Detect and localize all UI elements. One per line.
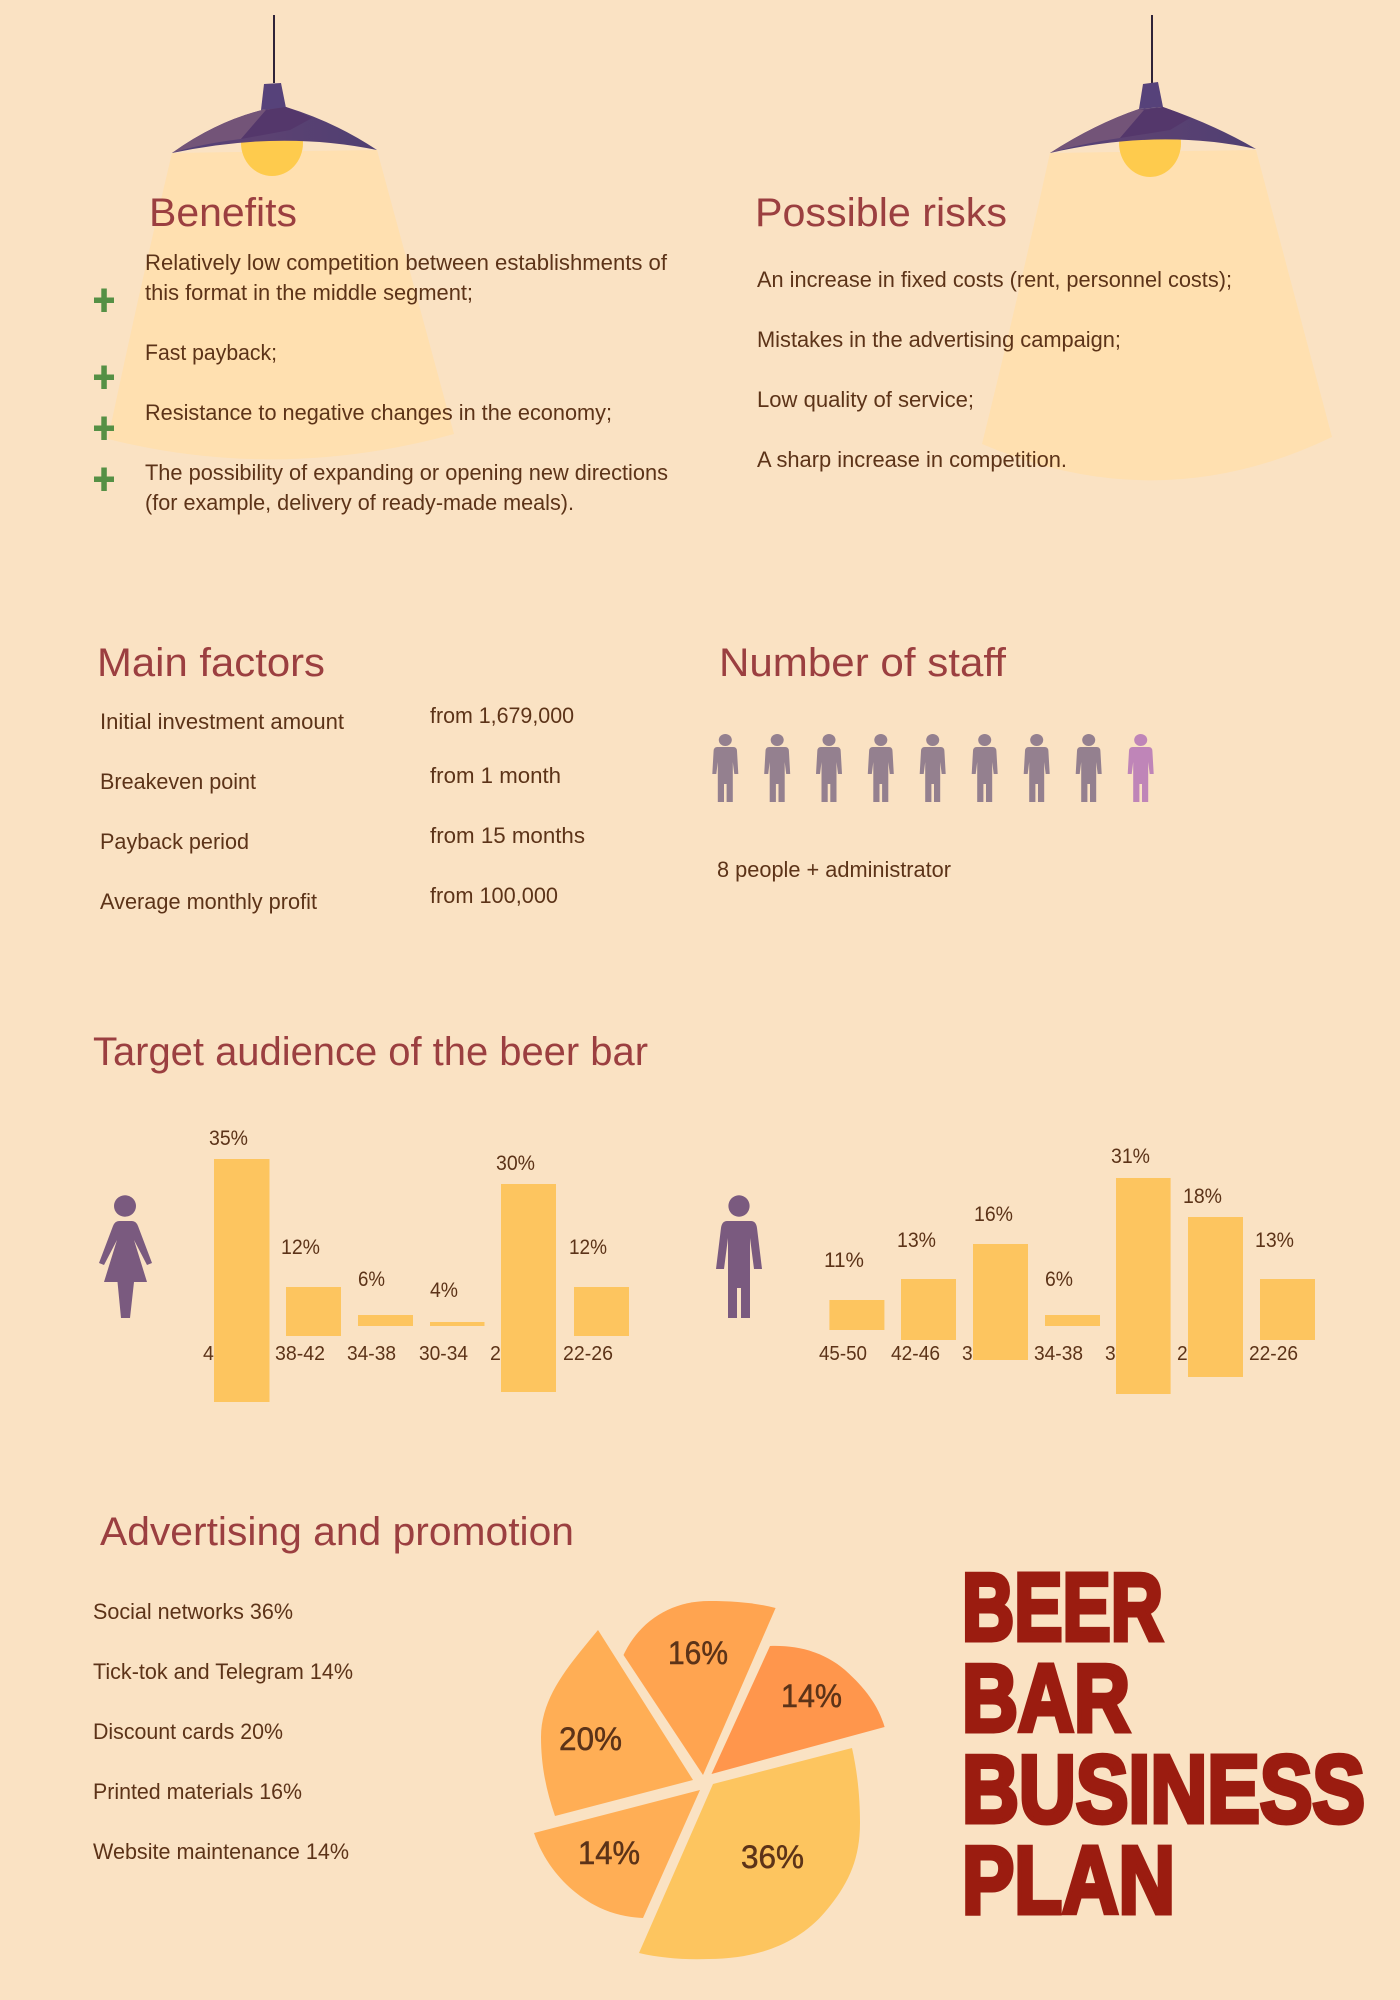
risks list: An increase in fixed costs (rent, personnel costs); bbox=[757, 267, 1232, 292]
staff caption: 8 people + administrator bbox=[717, 857, 951, 882]
staff pictogram bbox=[712, 734, 1154, 802]
main factors table: Initial investment amount bbox=[100, 709, 344, 734]
bar chart: women: 42-46 bbox=[203, 1343, 253, 1365]
main factors table: from 15 months bbox=[430, 823, 585, 848]
bar chart: women: 4% bbox=[430, 1279, 458, 1302]
benefits list bbox=[145, 250, 668, 515]
bar chart: women: 12% bbox=[569, 1236, 607, 1259]
bar chart: men: 30-34 bbox=[1105, 1343, 1154, 1365]
slice: 36% bbox=[639, 1748, 860, 1959]
plus icons bbox=[94, 288, 114, 491]
advertising list: Website maintenance 14% bbox=[93, 1839, 349, 1864]
benefits list: Fast payback; bbox=[145, 340, 277, 365]
bar chart: men: 45-50 bbox=[819, 1343, 867, 1365]
title bbox=[962, 1554, 1365, 1934]
lamp: risks bbox=[982, 15, 1332, 480]
bar chart: women bbox=[203, 1127, 629, 1402]
bar chart: men: 34-38 bbox=[1034, 1343, 1083, 1365]
risks list: A sharp increase in competition. bbox=[757, 447, 1067, 472]
bar chart: men: 18% bbox=[1183, 1185, 1222, 1208]
title: PLAN bbox=[962, 1827, 1175, 1934]
bar chart: men: 11% bbox=[824, 1249, 864, 1272]
pie chart: 14% bbox=[578, 1835, 640, 1871]
main factors table: Breakeven point bbox=[100, 769, 256, 794]
bar chart: men bbox=[819, 1145, 1315, 1394]
icon: man bbox=[716, 1195, 762, 1318]
bar chart: men: 38-42 bbox=[962, 1343, 1011, 1365]
benefits list: Relatively low competition between establishments of bbox=[145, 250, 668, 275]
bar chart: women: 34-38 bbox=[347, 1343, 396, 1365]
lamp shade: risks bbox=[1050, 82, 1256, 153]
benefits list: The possibility of expanding or opening new directions bbox=[145, 460, 668, 485]
advertising list bbox=[93, 1599, 353, 1864]
main factors table: Payback period bbox=[100, 829, 249, 854]
risks list: Low quality of service; bbox=[757, 387, 974, 412]
heading: advertising: Advertising and promotion bbox=[100, 1510, 574, 1554]
cable: benefits bbox=[273, 15, 275, 83]
bar chart: women: 12% bbox=[281, 1236, 320, 1259]
risks list bbox=[757, 267, 1232, 472]
advertising list: Social networks 36% bbox=[93, 1599, 293, 1624]
bulb: benefits bbox=[241, 110, 303, 176]
cable: risks bbox=[1151, 15, 1153, 83]
heading: possible risks: Possible risks bbox=[755, 191, 1007, 235]
heading: target audience: Target audience of the beer bar bbox=[93, 1030, 648, 1074]
benefits list: this format in the middle segment; bbox=[145, 280, 473, 305]
slice: 14% lower bbox=[534, 1790, 700, 1918]
main factors table: Average monthly profit bbox=[100, 889, 317, 914]
heading: benefits: Benefits bbox=[149, 191, 297, 235]
main factors table: from 1 month bbox=[430, 763, 561, 788]
bar chart: women: 22-26 bbox=[563, 1343, 613, 1365]
slice: 16% bbox=[624, 1601, 776, 1775]
slice: 20% bbox=[541, 1630, 693, 1816]
risks list: Mistakes in the advertising campaign; bbox=[757, 327, 1121, 352]
bar chart: women: 30-34 bbox=[419, 1343, 468, 1365]
bar chart: men: 13% bbox=[897, 1229, 936, 1252]
pie chart: 20% bbox=[559, 1721, 622, 1757]
slice: 14% orange bbox=[712, 1646, 885, 1774]
benefits list: (for example, delivery of ready-made meals). bbox=[145, 490, 574, 515]
benefits list: Resistance to negative changes in the economy; bbox=[145, 400, 612, 425]
light beam: benefits bbox=[108, 150, 454, 459]
light beam: risks bbox=[982, 150, 1332, 480]
title: BAR bbox=[962, 1645, 1130, 1752]
main factors table bbox=[100, 703, 585, 914]
main factors table: from 100,000 bbox=[430, 883, 558, 908]
lamp shade: benefits bbox=[172, 83, 377, 153]
lamp: benefits bbox=[108, 15, 454, 459]
advertising list: Discount cards 20% bbox=[93, 1719, 283, 1744]
pie chart: 16% bbox=[668, 1635, 728, 1671]
bar chart: men: 13% bbox=[1255, 1229, 1294, 1252]
main factors table: from 1,679,000 bbox=[430, 703, 574, 728]
icon: woman bbox=[99, 1195, 152, 1318]
bar chart: women: 35% bbox=[209, 1127, 248, 1150]
pie chart: 36% bbox=[741, 1839, 804, 1875]
bar chart: men: 16% bbox=[974, 1203, 1013, 1226]
bar chart: women: 26-30 bbox=[490, 1343, 540, 1365]
advertising list: Tick-tok and Telegram 14% bbox=[93, 1659, 353, 1684]
heading: number of staff: Number of staff bbox=[719, 641, 1007, 685]
bar chart: men: 42-46 bbox=[891, 1343, 940, 1365]
title: BEER bbox=[962, 1554, 1163, 1661]
bar chart: women: 6% bbox=[358, 1268, 385, 1291]
bar chart: women: 38-42 bbox=[275, 1343, 325, 1365]
bar chart: men: 31% bbox=[1111, 1145, 1150, 1168]
advertising list: Printed materials 16% bbox=[93, 1779, 302, 1804]
bar chart: men: 6% bbox=[1045, 1268, 1073, 1291]
bar chart: men: 22-26 bbox=[1249, 1343, 1298, 1365]
bulb: risks bbox=[1119, 109, 1181, 177]
bar chart: men: 26-30 bbox=[1177, 1343, 1226, 1365]
pie chart: 14% bbox=[781, 1678, 842, 1714]
pie chart bbox=[534, 1601, 885, 1959]
bar chart: women: 30% bbox=[496, 1152, 535, 1175]
heading: main factors: Main factors bbox=[97, 641, 325, 685]
